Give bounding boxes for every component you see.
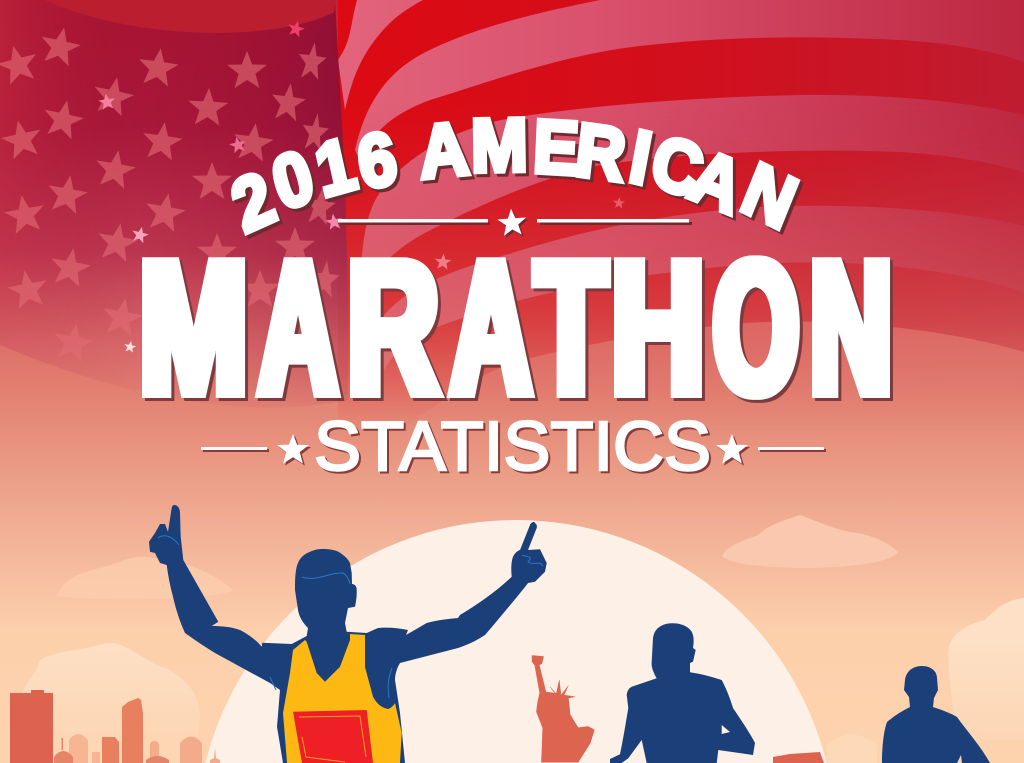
- title: Marathon: T: [536, 222, 606, 434]
- main runner with arms raised: [149, 505, 547, 763]
- title line: 2016 American: 2: [222, 159, 288, 251]
- title: Marathon: M: [140, 222, 247, 434]
- title: Marathon: R: [351, 225, 442, 437]
- bib inner line: [299, 716, 366, 762]
- title: Marathon: A: [451, 222, 531, 434]
- title line: 2016 American: 0: [261, 135, 323, 226]
- title: Marathon: N: [814, 225, 895, 437]
- title line: 2016 American: A: [681, 132, 755, 228]
- sun: [205, 520, 827, 763]
- title line: 2016 American: A: [415, 106, 472, 194]
- second runner: [610, 623, 755, 763]
- title line: 2016 American: A: [418, 109, 475, 197]
- title: Marathon: M: [143, 225, 250, 437]
- runner body silhouette: [149, 505, 547, 763]
- sparkle stars: [98, 19, 626, 353]
- flag canton with stars: [0, 0, 348, 408]
- title line: 2016 American: N: [731, 146, 810, 243]
- title: Marathon: H: [612, 222, 704, 434]
- title: Marathon: [140, 222, 895, 437]
- title line: 2016 American: 0: [264, 138, 326, 229]
- subtitle: Statistics with stars and rules: STATISTICS: [316, 409, 713, 487]
- title: Marathon: A: [262, 225, 340, 437]
- title line: 2016 American: 1: [309, 125, 366, 216]
- title: Marathon: N: [810, 222, 892, 434]
- title: Marathon: A: [454, 225, 534, 437]
- skyline left: [10, 690, 220, 763]
- title: Marathon: A: [259, 222, 337, 434]
- skyline right: [773, 752, 824, 763]
- yellow vest: [283, 634, 402, 763]
- subtitle: Statistics with stars and rules: STATISTICS: [314, 407, 711, 485]
- title line: 2016 American: E: [535, 107, 584, 193]
- gap in second runner's arm: [722, 725, 730, 734]
- title line: 2016 American: [219, 103, 813, 251]
- title line: 2016 American: I: [624, 114, 659, 200]
- title: Marathon: H: [615, 225, 707, 437]
- third runner: [882, 666, 990, 763]
- title line: 2016 American: N: [734, 149, 813, 246]
- divider with star under arc: [338, 208, 692, 238]
- Statue of Liberty: [532, 656, 594, 762]
- title line: 2016 American: A: [684, 135, 758, 231]
- canton field: [0, 0, 348, 408]
- title line: 2016 American: 2: [219, 156, 285, 248]
- title line: 2016 American: C: [643, 118, 713, 212]
- title: Marathon: O: [716, 225, 802, 437]
- muscle highlights: [158, 536, 543, 698]
- canton side shading: [0, 0, 348, 408]
- title line: 2016 American: 1: [306, 122, 363, 213]
- subtitle: Statistics with stars and rules: [201, 407, 826, 487]
- title line: 2016 American: 6: [354, 119, 405, 208]
- flag stripes: [338, 0, 1024, 430]
- title line: 2016 American: R: [572, 107, 631, 197]
- title: Marathon: T: [539, 225, 609, 437]
- title line: 2016 American: C: [646, 121, 716, 215]
- title line: 2016 American: M: [473, 106, 531, 190]
- title line: 2016 American: M: [470, 103, 528, 187]
- title: Marathon: O: [713, 222, 799, 434]
- red race bib: [293, 710, 373, 763]
- title line: 2016 American: 6: [351, 116, 402, 205]
- title line: 2016 American: E: [532, 104, 581, 190]
- title line: 2016 American: I: [627, 117, 662, 203]
- title line: 2016 American: R: [575, 110, 634, 200]
- stars on canton: [0, 23, 341, 363]
- canton folded top edge: [44, 0, 336, 33]
- clouds: [10, 515, 1024, 763]
- title: Marathon: R: [348, 222, 438, 434]
